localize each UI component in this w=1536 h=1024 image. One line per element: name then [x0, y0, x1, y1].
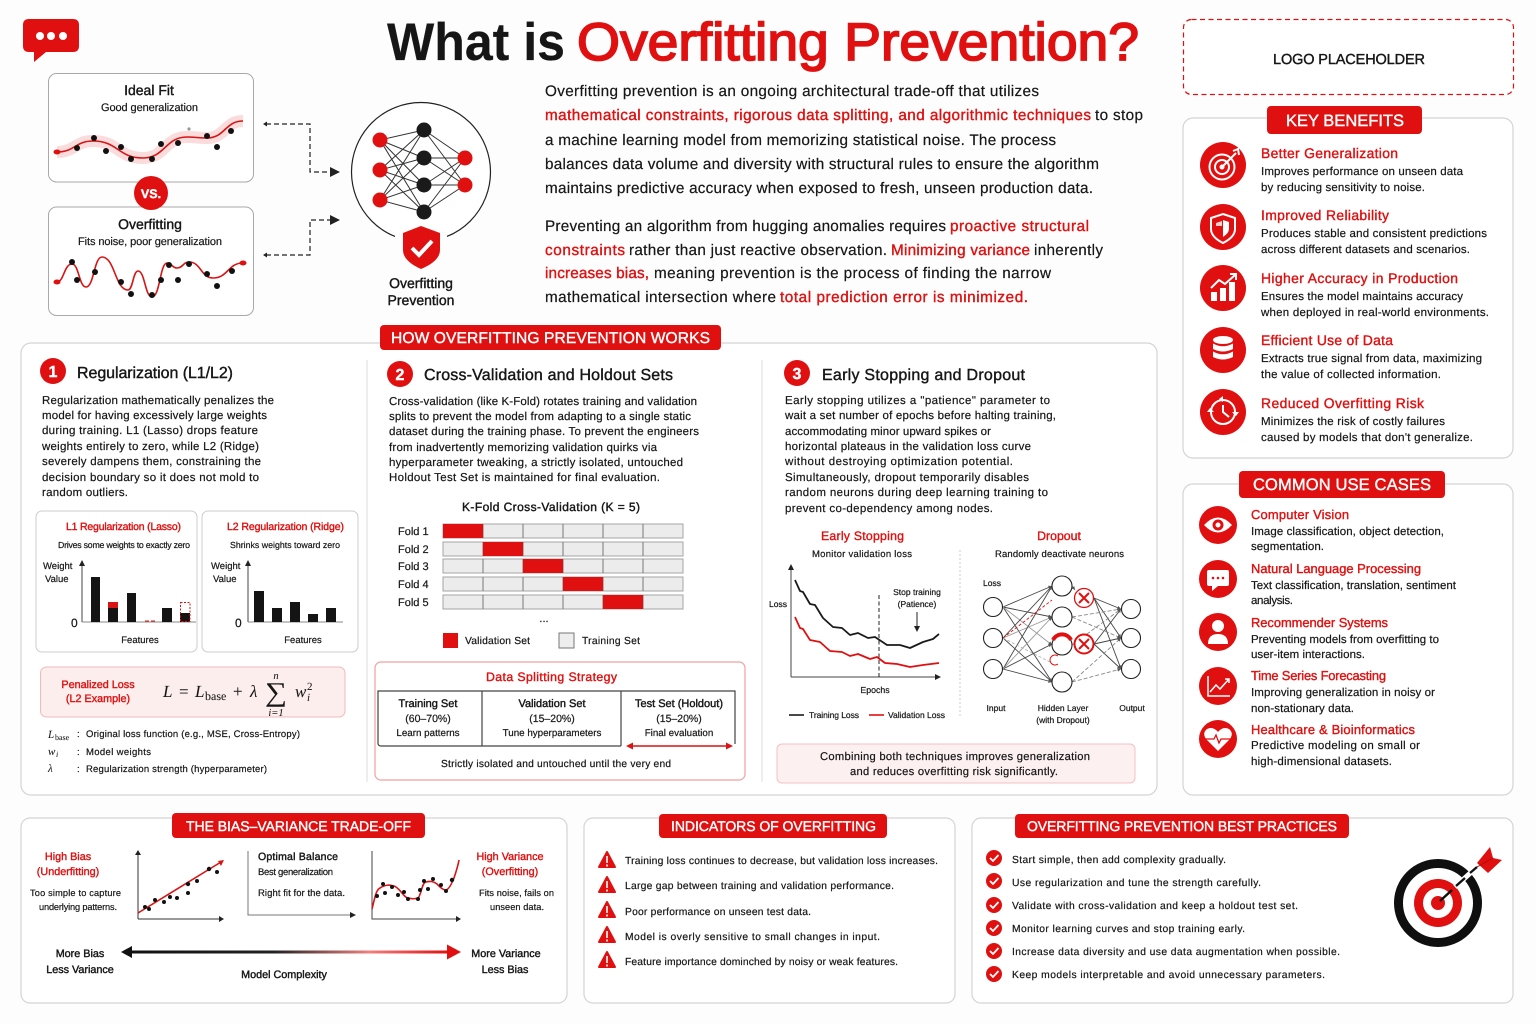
chart: early stopping: Loss: [769, 599, 787, 609]
text: regularization description: decision boundary so it does not mold to: [42, 472, 259, 484]
step 3 heading: [784, 360, 1026, 386]
indicator 4: Model is overly sensitive to small changes in input.: [625, 932, 880, 943]
chart: early stopping: Epochs: [860, 685, 890, 695]
heading badge: how it works: HOW OVERFITTING PREVENTION WORKS: [391, 330, 710, 347]
legend: formula terms: :: [77, 764, 80, 775]
chart: early stopping: Stop training: [893, 587, 941, 597]
indicator 3: [599, 902, 811, 918]
chart: dropout network: Output: [1119, 703, 1145, 713]
text: early stopping description: horizontal plateaus in the validation loss curve: [785, 441, 1031, 453]
chart: k-fold cross-validation: [398, 500, 683, 648]
formula: penalized loss: +: [233, 682, 243, 701]
formula: penalized loss: λ: [249, 682, 257, 701]
card: L1 bar chart: L1 Regularization (Lasso): [66, 521, 181, 533]
text: intro paragraph 2: mathematical intersection where: [545, 289, 776, 306]
chart: dropout network: Hidden Layer: [1038, 703, 1088, 713]
chart: early stopping: [769, 529, 945, 720]
chart: k-fold cross-validation: Fold 1: [398, 526, 429, 538]
box: data splitting strategy: [375, 662, 745, 780]
chart: overfit curve: [372, 851, 461, 922]
card: L2 bar chart: Shrinks weights toward zero: [230, 540, 340, 550]
benefit: better generalization: by reducing sensitivity to noise.: [1261, 182, 1425, 194]
practice 3: Validate with cross-validation and keep a holdout test set.: [1012, 901, 1298, 912]
benefit: improved reliability: [1200, 204, 1487, 256]
heading badge: common use cases: [1239, 471, 1445, 498]
use case: recommender systems: [1199, 613, 1439, 661]
benefit: improved reliability: Improved Reliability: [1261, 207, 1389, 223]
card: L1 bar chart: Features: [121, 635, 159, 646]
heading badge: common use cases: COMMON USE CASES: [1253, 476, 1431, 494]
use case: computer vision: Computer Vision: [1251, 507, 1349, 522]
chart: k-fold cross-validation: K-Fold Cross-Validation (K = 5): [462, 500, 640, 514]
panel: how overfitting prevention works: [21, 325, 1157, 795]
text: regularization description: model for having excessively large weights: [42, 410, 267, 422]
indicator 4: [599, 927, 880, 943]
text: cross-validation description: hyperparameter tweaking, a strictly isolated, untouched: [389, 457, 683, 469]
arrow: ideal fit to network: [263, 122, 340, 177]
text: intro paragraph 1: mathematical constraints, rigorous data splitting, and algorithmic techniques: [545, 107, 1091, 124]
chart: k-fold cross-validation: Fold 2: [398, 544, 429, 556]
panel: overfitting: [48, 207, 254, 316]
text: optimal balance: [248, 851, 356, 918]
label: more variance: Less Bias: [482, 964, 529, 976]
text: cross-validation description: Cross-validation (like K-Fold) rotates training and validation: [389, 396, 697, 408]
step 1 heading: [40, 358, 233, 384]
legend: formula terms: Regularization strength (hyperparameter): [86, 764, 267, 775]
text: high bias: [30, 851, 121, 912]
card: L2 bar chart: Features: [284, 635, 322, 646]
legend: formula terms: :: [77, 747, 80, 758]
text: intro paragraph 1: maintains predictive accuracy when exposed to fresh, unseen production data.: [545, 180, 1093, 197]
text: regularization description: during training. L1 (Lasso) drops feature: [42, 425, 258, 437]
caption: good generalization: Good generalization: [101, 102, 198, 114]
practice 1: [986, 850, 1226, 866]
benefit: better generalization: Better Generalization: [1261, 145, 1398, 161]
use case: recommender systems: Recommender Systems: [1251, 615, 1388, 630]
heading badge: indicators: [659, 814, 887, 838]
text: intro paragraph 1: Overfitting prevention is an ongoing architectural trade-off that utilizes: [545, 83, 1039, 100]
text: intro paragraph 2: proactive structural: [950, 218, 1089, 235]
legend: formula terms: i: [56, 750, 58, 759]
callout: combining both techniques: [777, 744, 1135, 783]
chart: overfit curve: [54, 257, 246, 298]
formula: penalized loss: =: [179, 682, 189, 701]
step 2 heading: [387, 361, 673, 387]
text: high bias: (Underfitting): [37, 866, 99, 878]
benefit: reduced overfitting risk: [1200, 389, 1473, 444]
step 3 heading: 3: [793, 366, 802, 383]
logo placeholder: [1184, 20, 1514, 94]
benefit: efficient use of data: the value of collected information.: [1261, 369, 1441, 381]
indicator 2: Large gap between training and validation performance.: [625, 881, 894, 892]
text: high bias: High Bias: [45, 851, 92, 863]
use case: recommender systems: Preventing models from overfitting to: [1251, 634, 1439, 646]
practice 2: [986, 873, 1261, 889]
caption: fits noise: Fits noise, poor generalization: [78, 236, 222, 248]
badge: vs: [134, 176, 168, 210]
text: cross-validation description: from inadvertently memorizing validation quirks via: [389, 442, 658, 454]
formula: penalized loss: i: [307, 692, 310, 704]
chart: dropout network: Loss: [983, 578, 1001, 588]
benefit: efficient use of data: Extracts true signal from data, maximizing: [1261, 353, 1482, 365]
panel: common use cases: [1183, 471, 1513, 795]
benefit: improved reliability: Produces stable and consistent predictions: [1261, 228, 1487, 240]
text: optimal balance: Optimal Balance: [258, 851, 338, 863]
benefit: efficient use of data: Efficient Use of Data: [1261, 332, 1393, 348]
heading badge: best practices: OVERFITTING PREVENTION BEST PRACTICES: [1027, 818, 1337, 834]
text: regularization description: [41, 395, 274, 499]
text: optimal balance: Right fit for the data.: [258, 888, 345, 899]
use case: healthcare and bioinformatics: Healthcare & Bioinformatics: [1251, 722, 1415, 737]
text: intro paragraph 2: constraints: [545, 242, 625, 259]
chart: dropout network: [983, 529, 1145, 725]
legend: formula terms: w: [48, 746, 56, 758]
step 2 heading: 2: [396, 367, 405, 384]
text: intro paragraph 2: Preventing an algorithm from hugging anomalies requires: [545, 218, 946, 235]
text: early stopping description: Early stopping utilizes a "patience" parameter to: [785, 395, 1050, 407]
practice 4: [986, 920, 1245, 936]
text: high variance: unseen data.: [490, 902, 544, 912]
legend: formula terms: base: [55, 733, 70, 742]
use case: time series forecasting: non-stationary data.: [1251, 703, 1354, 715]
benefit: higher accuracy: [1200, 265, 1489, 319]
formula: penalized loss: base: [205, 689, 226, 703]
box: data splitting strategy: Test Set (Holdout): [635, 698, 723, 710]
card: L2 bar chart: 0: [235, 616, 242, 630]
chart: dropout network: (with Dropout): [1036, 715, 1090, 725]
legend: formula terms: L: [47, 729, 54, 741]
use case: healthcare and bioinformatics: Predictive modeling on small or: [1251, 740, 1420, 752]
text: intro paragraph 2: [545, 218, 1103, 306]
step 3 heading: Early Stopping and Dropout: [822, 367, 1026, 384]
heading badge: best practices: [1015, 814, 1349, 838]
text: intro paragraph 1: to stop: [1095, 107, 1143, 124]
use case: computer vision: segmentation.: [1251, 541, 1324, 553]
callout: combining both techniques: and reduces overfitting risk significantly.: [850, 766, 1058, 778]
legend: formula terms: [47, 729, 300, 775]
benefit: better generalization: Improves performance on unseen data: [1261, 166, 1464, 178]
chart: dropout network: Randomly deactivate neurons: [995, 549, 1124, 560]
chart: k-fold cross-validation: Training Set: [582, 636, 640, 647]
badge: vs: VS.: [141, 187, 161, 201]
text: intro paragraph 2: meaning prevention is the process of finding the narrow: [654, 265, 1052, 282]
card: L2 bar chart: Weight: [211, 561, 241, 572]
chart: k-fold cross-validation: Validation Set: [465, 636, 530, 647]
text: cross-validation description: dataset during the training phase. To prevent the engineers: [389, 426, 699, 438]
use case: healthcare and bioinformatics: [1199, 720, 1420, 768]
arrow: overfitting to network: [263, 215, 340, 258]
icon: neural network with shield: [352, 102, 490, 274]
chart: k-fold cross-validation: ...: [539, 613, 549, 625]
text: regularization description: Regularization mathematically penalizes the: [42, 395, 274, 407]
box: data splitting strategy: (15–20%): [529, 713, 575, 725]
practice 5: Increase data diversity and use data augmentation when possible.: [1012, 947, 1340, 958]
card: L1 bar chart: Weight: [43, 561, 73, 572]
arrow: model complexity: [121, 944, 461, 981]
text: high variance: High Variance: [476, 851, 544, 863]
label: more bias: [46, 948, 114, 976]
title: What is: [387, 13, 565, 72]
use case: computer vision: [1199, 506, 1444, 553]
use case: computer vision: Image classification, object detection,: [1251, 526, 1444, 538]
text: early stopping description: random neurons during deep learning training to: [785, 487, 1048, 499]
indicator 5: [599, 952, 898, 968]
formula: penalized loss: L: [194, 682, 204, 701]
use case: time series forecasting: Time Series Forecasting: [1251, 668, 1386, 683]
indicator 1: Training loss continues to decrease, but validation loss increases.: [625, 856, 938, 867]
benefit: efficient use of data: [1200, 327, 1482, 381]
formula: penalized loss: n: [273, 671, 279, 682]
indicator 5: Feature importance dominched by noisy or weak features.: [625, 957, 898, 968]
practice 6: [986, 966, 1325, 982]
box: data splitting strategy: Training Set: [399, 698, 457, 710]
legend: formula terms: Model weights: [86, 747, 151, 758]
text: cross-validation description: splits to prevent the model from adapting to a single static: [389, 411, 691, 423]
card: L2 bar chart: Value: [213, 574, 237, 585]
text: early stopping description: Simultaneously, dropout temporarily disables: [785, 472, 1029, 484]
heading badge: indicators: INDICATORS OF OVERFITTING: [671, 818, 876, 834]
text: high variance: (Overfitting): [482, 866, 538, 878]
benefit: reduced overfitting risk: Reduced Overfitting Risk: [1261, 395, 1424, 411]
benefit: higher accuracy: Ensures the model maintains accuracy: [1261, 291, 1463, 303]
chart: early stopping: Monitor validation loss: [812, 549, 912, 560]
use case: time series forecasting: Improving generalization in noisy or: [1251, 687, 1435, 699]
text: intro paragraph 1: a machine learning model from memorizing statistical noise. The process: [545, 132, 1056, 149]
formula: penalized loss: [40, 667, 345, 719]
text: high variance: Fits noise, fails on: [479, 888, 554, 898]
step 2 heading: Cross-Validation and Holdout Sets: [424, 367, 673, 384]
text: regularization description: random outliers.: [42, 487, 128, 499]
chart: dropout network: Dropout: [1037, 529, 1081, 543]
label: more bias: More Bias: [56, 948, 105, 960]
benefit: better generalization: [1200, 142, 1464, 194]
formula: penalized loss: i=1: [268, 708, 284, 719]
formula: penalized loss: L: [162, 682, 172, 701]
card: L2 bar chart: L2 Regularization (Ridge): [227, 521, 344, 533]
text: intro paragraph 1: balances data volume and diversity with structural rules to ensure the algorithm: [545, 156, 1099, 173]
text: cross-validation description: Holdout Test Set is maintained for final evaluation.: [389, 472, 660, 484]
heading badge: key benefits: KEY BENEFITS: [1286, 112, 1404, 130]
formula: penalized loss: Penalized Loss: [61, 679, 135, 691]
text: early stopping description: [784, 395, 1056, 515]
chart: early stopping: (Patience): [898, 599, 937, 609]
box: data splitting strategy: Data Splitting Strategy: [486, 670, 618, 684]
panel: indicators of overfitting: [584, 814, 955, 1003]
use case: healthcare and bioinformatics: high-dimensional datasets.: [1251, 756, 1392, 768]
legend: formula terms: :: [77, 729, 80, 740]
benefit: reduced overfitting risk: Minimizes the risk of costly failures: [1261, 416, 1445, 428]
heading badge: bias-variance: [172, 813, 425, 838]
panel: key benefits: [1183, 106, 1513, 458]
formula: penalized loss: (L2 Example): [66, 693, 130, 705]
heading badge: bias-variance: THE BIAS–VARIANCE TRADE-OFF: [186, 818, 411, 834]
step 1 heading: 1: [49, 364, 58, 381]
chart: ideal fit curve: [54, 121, 243, 162]
text: intro paragraph 1: [545, 83, 1143, 197]
use case: time series forecasting: [1199, 667, 1435, 715]
label: overfitting prevention: [388, 275, 454, 308]
text: intro paragraph 2: Minimizing variance: [891, 242, 1030, 259]
formula: penalized loss: w: [295, 682, 307, 701]
chart: early stopping: Training Loss: [809, 710, 859, 720]
text: intro paragraph 2: inherently: [1034, 242, 1103, 259]
legend: formula terms: λ: [47, 763, 53, 775]
label: more bias: Less Variance: [46, 964, 114, 976]
chart: k-fold cross-validation: Fold 5: [398, 597, 429, 609]
panel: ideal fit: [48, 74, 254, 182]
logo placeholder: LOGO PLACEHOLDER: [1273, 52, 1425, 68]
icon: target with dart: [1398, 847, 1502, 942]
box: data splitting strategy: Validation Set: [518, 698, 586, 710]
label: overfitting prevention: Overfitting: [389, 275, 453, 291]
indicator 1: [599, 852, 938, 867]
use case: natural language processing: [1199, 560, 1457, 607]
text: high bias: Too simple to capture: [30, 888, 121, 898]
text: cross-validation description: [389, 396, 699, 484]
use case: natural language processing: Natural Language Processing: [1251, 561, 1421, 576]
text: early stopping description: prevent co-dependency among nodes.: [785, 503, 993, 515]
box: data splitting strategy: Learn patterns: [396, 728, 460, 739]
text: intro paragraph 2: rather than just reactive observation.: [629, 242, 887, 259]
text: high variance: [476, 851, 554, 912]
heading: overfitting: Overfitting: [118, 216, 182, 232]
panel: bias-variance trade-off: [21, 813, 567, 1003]
text: early stopping description: without destroying optimization potential.: [784, 456, 1013, 468]
text: early stopping description: wait a set number of epochs before halting training,: [784, 410, 1056, 422]
use case: natural language processing: Text classification, translation, sentiment: [1251, 580, 1457, 592]
title: Overfitting Prevention?: [577, 13, 1139, 72]
text: high bias: underlying patterns.: [39, 902, 117, 912]
heading: ideal fit: Ideal Fit: [124, 82, 174, 98]
card: L1 bar chart: 0: [71, 616, 78, 630]
step 1 heading: Regularization (L1/L2): [77, 365, 233, 382]
use case: natural language processing: analysis.: [1251, 595, 1293, 607]
chart: early stopping: Early Stopping: [821, 529, 904, 543]
practice 5: [986, 943, 1340, 959]
indicator 2: [599, 877, 894, 892]
chart: k-fold cross-validation: Fold 3: [398, 561, 429, 573]
heading badge: key benefits: [1267, 106, 1422, 134]
label: overfitting prevention: Prevention: [388, 292, 454, 308]
card: L1 bar chart: Value: [45, 574, 69, 585]
chart: dropout network: Input: [987, 703, 1006, 713]
benefit: reduced overfitting risk: caused by models that don't generalize.: [1261, 432, 1473, 444]
callout: combining both techniques: Combining both techniques improves generalization: [820, 751, 1090, 763]
chart: underfit line: [135, 850, 224, 922]
card: L1 bar chart: Drives some weights to exactly zero: [58, 540, 190, 550]
text: regularization description: weights entirely to zero, while L2 (Ridge): [41, 441, 259, 453]
formula: penalized loss: ∑: [265, 677, 287, 707]
panel: best practices: [972, 814, 1513, 1003]
text: optimal balance: Best generalization: [258, 867, 333, 878]
box: data splitting strategy: (60–70%): [405, 713, 451, 725]
heading badge: how it works: [380, 325, 721, 350]
label: more variance: More Variance: [471, 948, 541, 960]
practice 3: [986, 897, 1298, 913]
legend: formula terms: Original loss function (e.g., MSE, Cross-Entropy): [86, 729, 300, 740]
box: data splitting strategy: (15–20%): [656, 713, 702, 725]
practice 6: Keep models interpretable and avoid unnecessary parameters.: [1012, 970, 1325, 981]
icon: chat bubble logo: [23, 19, 79, 62]
text: regularization description: severely dampens them, constraining the: [42, 456, 261, 468]
use case: recommender systems: user-item interactions.: [1251, 649, 1365, 661]
practice 1: Start simple, then add complexity gradually.: [1012, 855, 1226, 866]
box: data splitting strategy: Tune hyperparameters: [503, 728, 601, 739]
benefit: higher accuracy: Higher Accuracy in Production: [1261, 270, 1458, 286]
benefit: higher accuracy: when deployed in real-world environments.: [1260, 307, 1489, 319]
arrow: model complexity: Model Complexity: [241, 969, 328, 981]
indicator 3: Poor performance on unseen test data.: [625, 907, 811, 918]
box: data splitting strategy: Strictly isolated and untouched until the very end: [441, 759, 671, 770]
practice 4: Monitor learning curves and stop training early.: [1012, 924, 1245, 935]
text: intro paragraph 2: increases bias,: [545, 265, 649, 282]
text: early stopping description: accommodating minor upward spikes or: [785, 426, 991, 438]
label: more variance: [471, 948, 541, 976]
card: L1 bar chart: [36, 511, 197, 652]
card: L2 bar chart: [202, 511, 358, 652]
chart: k-fold cross-validation: Fold 4: [398, 579, 429, 591]
practice 2: Use regularization and tune the strength carefully.: [1012, 878, 1261, 889]
benefit: improved reliability: across different datasets and scenarios.: [1261, 244, 1470, 256]
formula: penalized loss: 2: [307, 681, 312, 693]
box: data splitting strategy: Final evaluation: [645, 728, 713, 739]
chart: early stopping: Validation Loss: [888, 710, 945, 720]
text: intro paragraph 2: total prediction error is minimized.: [780, 289, 1028, 306]
